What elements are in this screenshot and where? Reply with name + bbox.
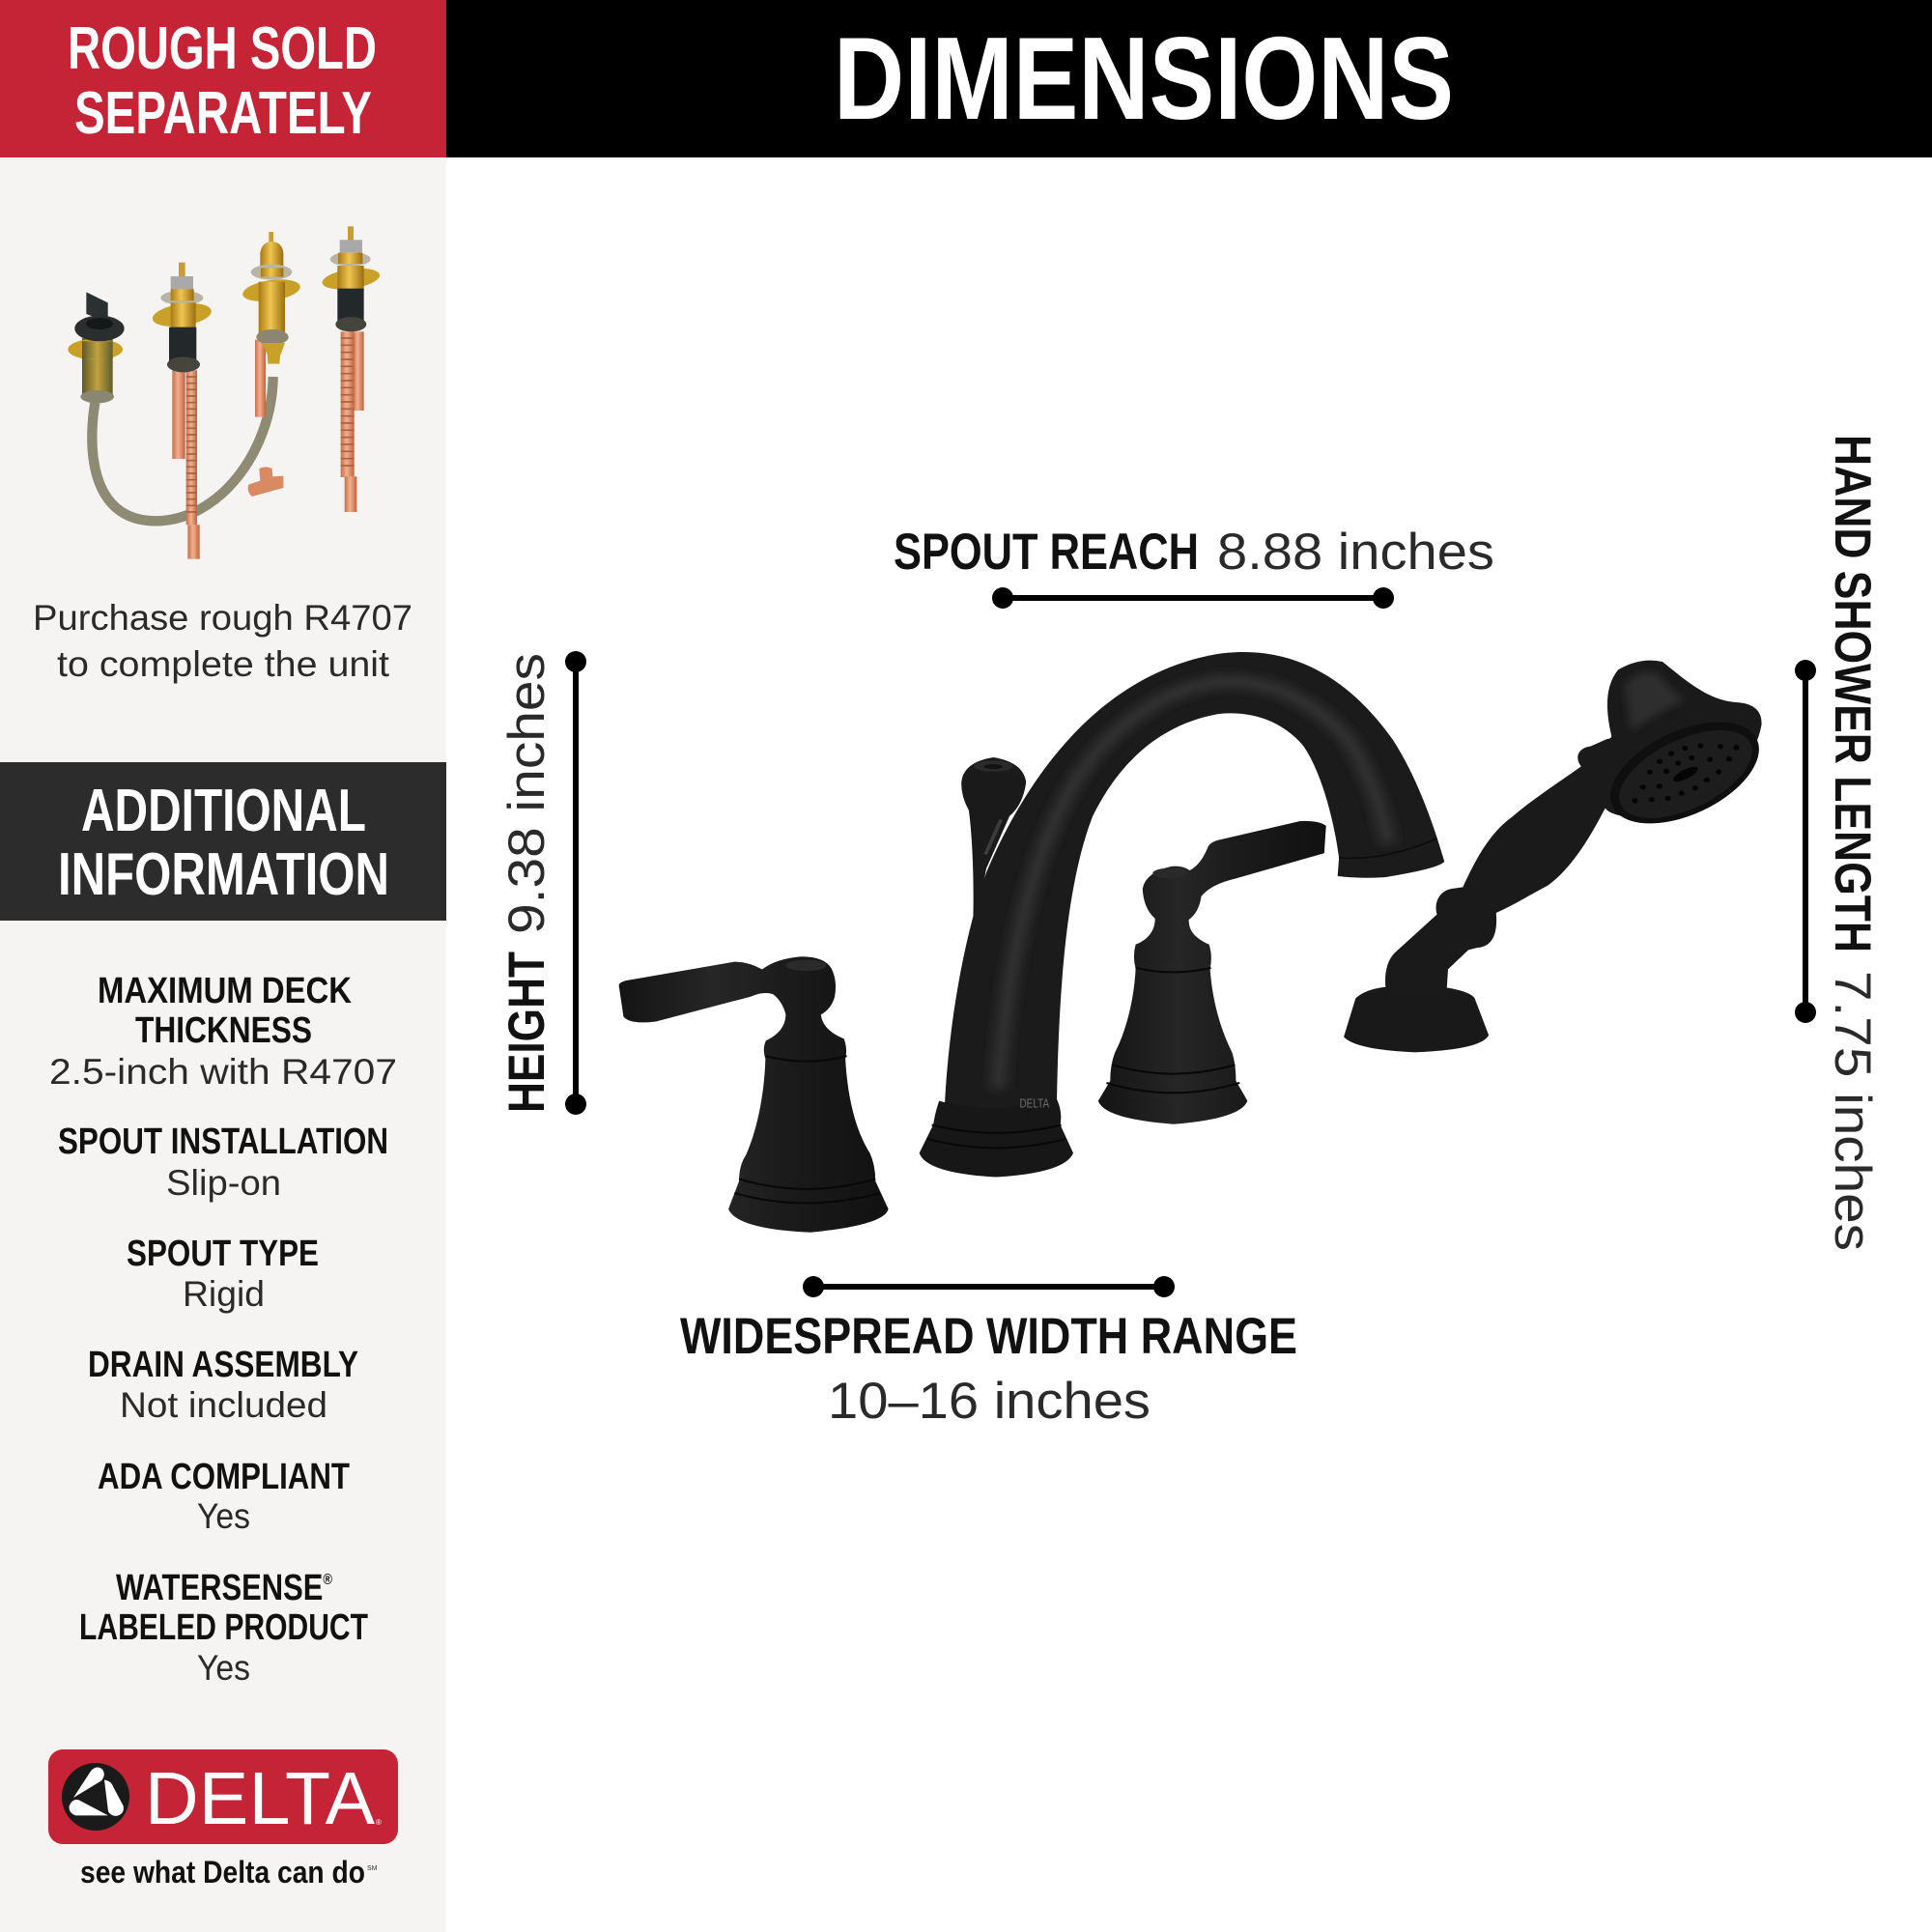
banner: dimensions title <box>446 0 1932 157</box>
spout base <box>920 1099 1073 1177</box>
image: rough valve kit <box>68 226 381 559</box>
dimension: spout reach <box>894 524 1494 609</box>
spec: spout type <box>127 1234 319 1314</box>
valve four <box>321 226 381 512</box>
spec: ada compliant: Yes <box>197 1496 250 1536</box>
image: hand shower <box>1344 661 1779 1052</box>
banner: dimensions title: DIMENSIONS <box>834 13 1454 144</box>
rear post behind spout <box>961 757 1026 941</box>
dimension: height: HEIGHT <box>498 952 555 1113</box>
dimension: height: 9.38 inches <box>498 653 555 934</box>
shower face with spray holes <box>1590 701 1779 844</box>
banner: additional information: ADDITIONAL <box>81 778 366 844</box>
panel: sidebar <box>0 157 446 1932</box>
logo: delta: see what Delta can do <box>80 1855 365 1889</box>
spec: ada compliant: ADA COMPLIANT <box>98 1457 350 1497</box>
spec: maximum deck thickness: 2.5-inch with R4707 <box>49 1052 397 1092</box>
shower mount base <box>1344 987 1489 1052</box>
spec: spout installation <box>58 1122 388 1203</box>
icon: delta triangle mark <box>70 1768 124 1816</box>
copper tee fitting <box>248 467 283 497</box>
spec: spout type: Rigid <box>183 1274 265 1314</box>
dimension: widespread width range: WIDESPREAD WIDTH RANGE <box>680 1308 1297 1365</box>
dimension: height <box>498 651 586 1115</box>
caption: purchase rough: Purchase rough R4707 <box>33 598 412 638</box>
banner: rough sold separately: SEPARATELY <box>74 80 372 147</box>
right handle <box>1098 821 1326 1124</box>
spec: watersense: WATERSENSE <box>116 1568 370 1608</box>
banner: rough sold separately <box>0 0 446 157</box>
spec: maximum deck thickness: THICKNESS <box>135 1010 312 1051</box>
dimension: spout reach: SPOUT REACH <box>894 524 1199 581</box>
spec: watersense: LABELED PRODUCT <box>79 1607 368 1648</box>
spec: maximum deck thickness: MAXIMUM DECK <box>98 971 352 1011</box>
valve three <box>242 232 301 417</box>
spec: spout installation: SPOUT INSTALLATION <box>58 1122 388 1162</box>
left diverter valve <box>68 292 125 403</box>
spec: watersense <box>79 1568 368 1688</box>
dimension: spout reach: 8.88 inches <box>1217 524 1494 581</box>
caption: purchase rough <box>33 598 412 684</box>
shower handle and head <box>1385 661 1762 998</box>
spec: ada compliant <box>98 1457 350 1536</box>
spec: watersense: Yes <box>197 1648 250 1688</box>
faucet engraved brand: DELTA <box>1020 1096 1049 1110</box>
dimension: hand shower length <box>1795 435 1881 1251</box>
logo: delta <box>48 1749 398 1889</box>
spec: spout installation: Slip-on <box>166 1163 281 1203</box>
spec: drain assembly: DRAIN ASSEMBLY <box>88 1345 358 1385</box>
spec: maximum deck thickness <box>49 971 397 1092</box>
dimension: hand shower length: 7.75 inches <box>1824 971 1881 1251</box>
braided hose <box>92 377 273 521</box>
banner: additional information <box>0 762 446 921</box>
spec: spout type: SPOUT TYPE <box>127 1234 319 1274</box>
logo: delta: ® <box>376 1818 382 1827</box>
image: faucet set <box>619 652 1444 1233</box>
spec: drain assembly <box>88 1345 358 1425</box>
spec: drain assembly: Not included <box>120 1385 327 1425</box>
left handle <box>619 956 889 1233</box>
spec: watersense: ® <box>323 1572 332 1588</box>
banner: rough sold separately: ROUGH SOLD <box>68 15 377 82</box>
banner: additional information: INFORMATION <box>58 841 389 908</box>
spout <box>920 652 1444 1177</box>
caption: purchase rough: to complete the unit <box>57 644 390 684</box>
logo: delta: SM <box>367 1865 378 1872</box>
dimension: hand shower length: HAND SHOWER LENGTH <box>1824 435 1881 952</box>
logo: delta: DELTA <box>145 1757 376 1840</box>
valve two <box>151 263 213 559</box>
dimension: widespread width range: 10–16 inches <box>828 1373 1151 1430</box>
dimension: widespread width range <box>680 1276 1297 1430</box>
